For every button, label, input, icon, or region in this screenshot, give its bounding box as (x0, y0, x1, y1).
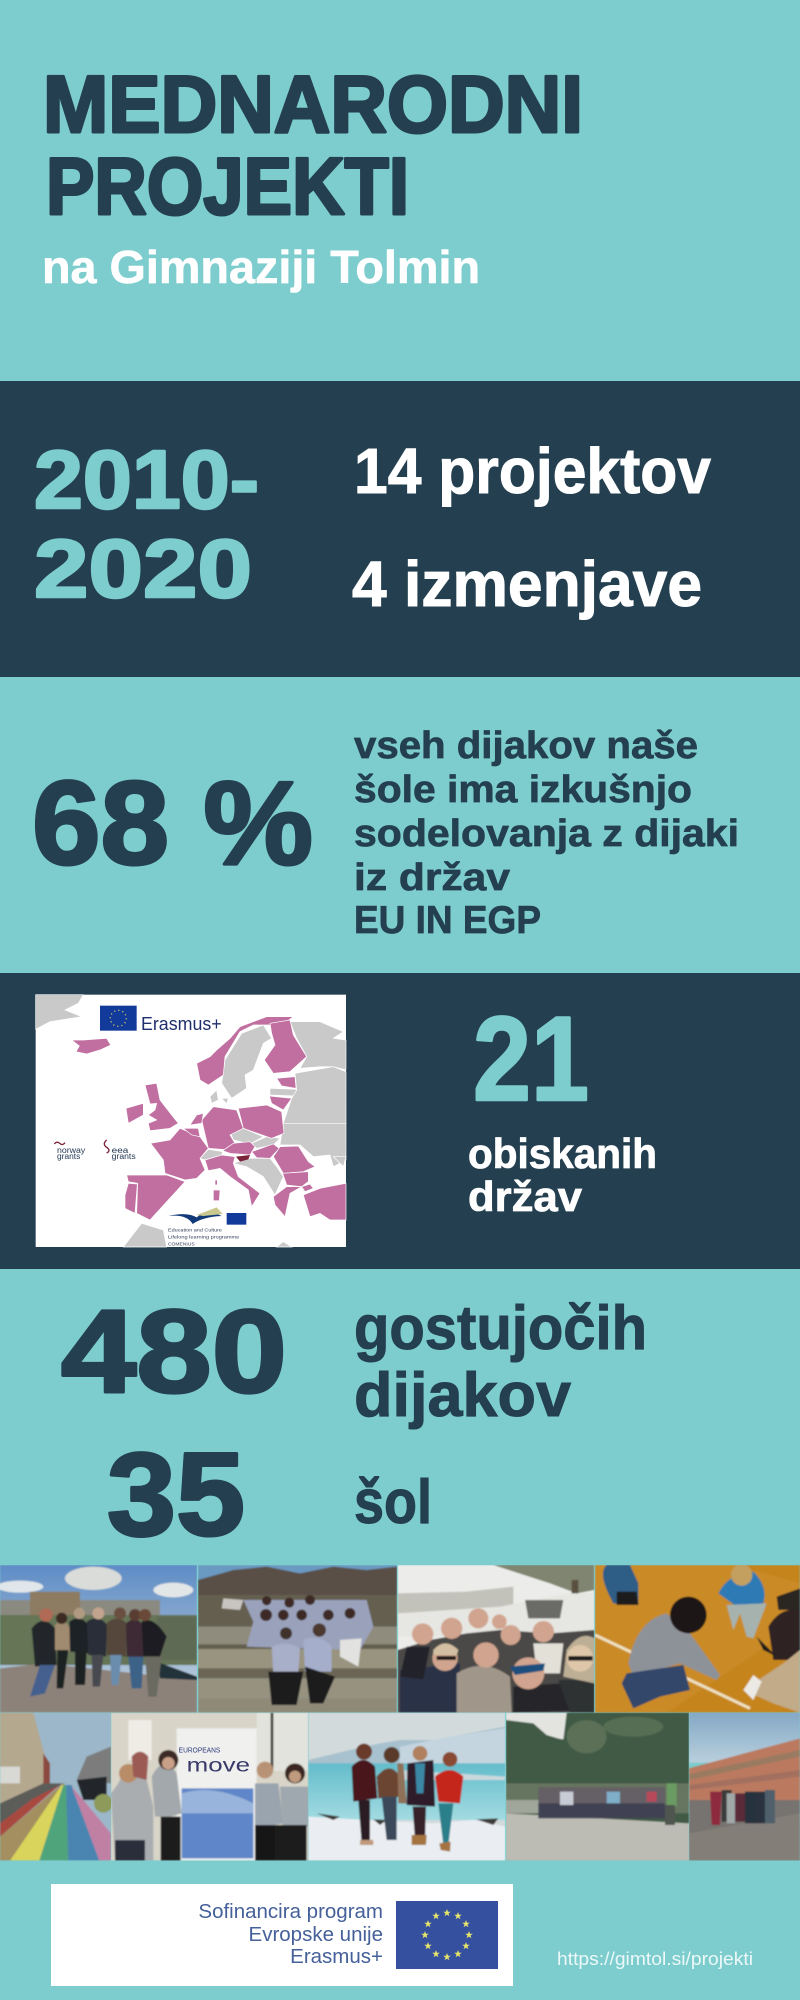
photo: selfie of teachers (398, 1565, 594, 1713)
photo: group on a plaza (689, 1713, 800, 1861)
country label: držav (468, 1173, 583, 1220)
years: 2010- (34, 433, 259, 526)
icon: lifelong learning logo: Lifelong learning programme (168, 1234, 240, 1239)
co-funding text: Evropske unije (249, 1923, 383, 1946)
photo: rainbow street (0, 1713, 113, 1861)
icon: EU flag (396, 1901, 498, 1969)
percent description: sodelovanja z dijaki (354, 813, 739, 855)
map of Europe (36, 995, 346, 1247)
icon: lifelong learning logo (166, 1207, 246, 1247)
icon: norway grants: grants (57, 1152, 80, 1161)
photo: big group on a river bank (506, 1713, 689, 1861)
header panel (42, 60, 583, 293)
school count: 35 (107, 1429, 245, 1561)
country count: 21 (473, 992, 589, 1126)
exchange count: 4 izmenjave (352, 548, 702, 620)
panel: visited countries (0, 973, 800, 1269)
title (43, 60, 583, 232)
school label: šol (354, 1468, 432, 1537)
icon: Erasmus+ logo: Erasmus+ (141, 1013, 222, 1034)
years: 2020 (34, 522, 252, 615)
percent description: šole ima izkušnjo (354, 769, 692, 811)
title: MEDNARODNI (43, 60, 583, 150)
photo: students beside project banner (111, 1713, 308, 1861)
years (34, 433, 259, 615)
icon: eea grants: grants (112, 1152, 136, 1161)
co-funding text: Erasmus+ (290, 1945, 383, 1968)
country label (468, 1130, 657, 1220)
icon: eea grants: eea (112, 1146, 129, 1155)
Slovenia highlight (236, 1155, 250, 1162)
guest student label: gostujočih (354, 1294, 647, 1363)
website address: https://gimtol.si/projekti (557, 1949, 753, 1969)
panel: years and projects (0, 381, 800, 677)
title: PROJEKTI (46, 142, 409, 232)
project count: 14 projektov (354, 435, 711, 507)
icon: Erasmus+ logo (100, 1006, 222, 1034)
co-funding text (198, 1900, 383, 1968)
photo: workshop on a gym floor (595, 1564, 800, 1713)
panel: guests and schools (0, 1269, 800, 1565)
co-funding logo (51, 1884, 513, 1986)
subtitle: na Gimnaziji Tolmin (42, 241, 480, 293)
photo: students on stone steps (198, 1565, 397, 1713)
photo: women at a snowy turquoise lake (308, 1713, 505, 1861)
photo strip (0, 1564, 800, 1861)
banner lettering: move (187, 1756, 250, 1777)
banner lettering: EUROPEANS (179, 1746, 220, 1755)
percent description: iz držav (354, 857, 510, 899)
guest student label: dijakov (354, 1361, 572, 1430)
guest student count: 480 (61, 1286, 287, 1418)
icon: norway grants: norway (57, 1146, 85, 1155)
percent description: vseh dijakov naše (354, 725, 698, 767)
photo: group on a paved promenade (0, 1565, 197, 1713)
banner lettering (179, 1748, 249, 1772)
percent figure: 68 % (32, 757, 313, 890)
co-funding text: Sofinancira program (198, 1900, 383, 1923)
percent description: EU IN EGP (354, 899, 541, 942)
percent description (354, 725, 739, 942)
country label: obiskanih (468, 1130, 657, 1177)
icon: eea grants (104, 1140, 136, 1161)
icon: lifelong learning logo: COMENIUS (168, 1241, 195, 1246)
panel: 68 percent (0, 677, 800, 973)
icon: lifelong learning logo: Education and Culture (168, 1227, 223, 1232)
icon: norway grants (54, 1142, 85, 1161)
guest student label (354, 1294, 647, 1430)
footer panel (51, 1884, 753, 1986)
